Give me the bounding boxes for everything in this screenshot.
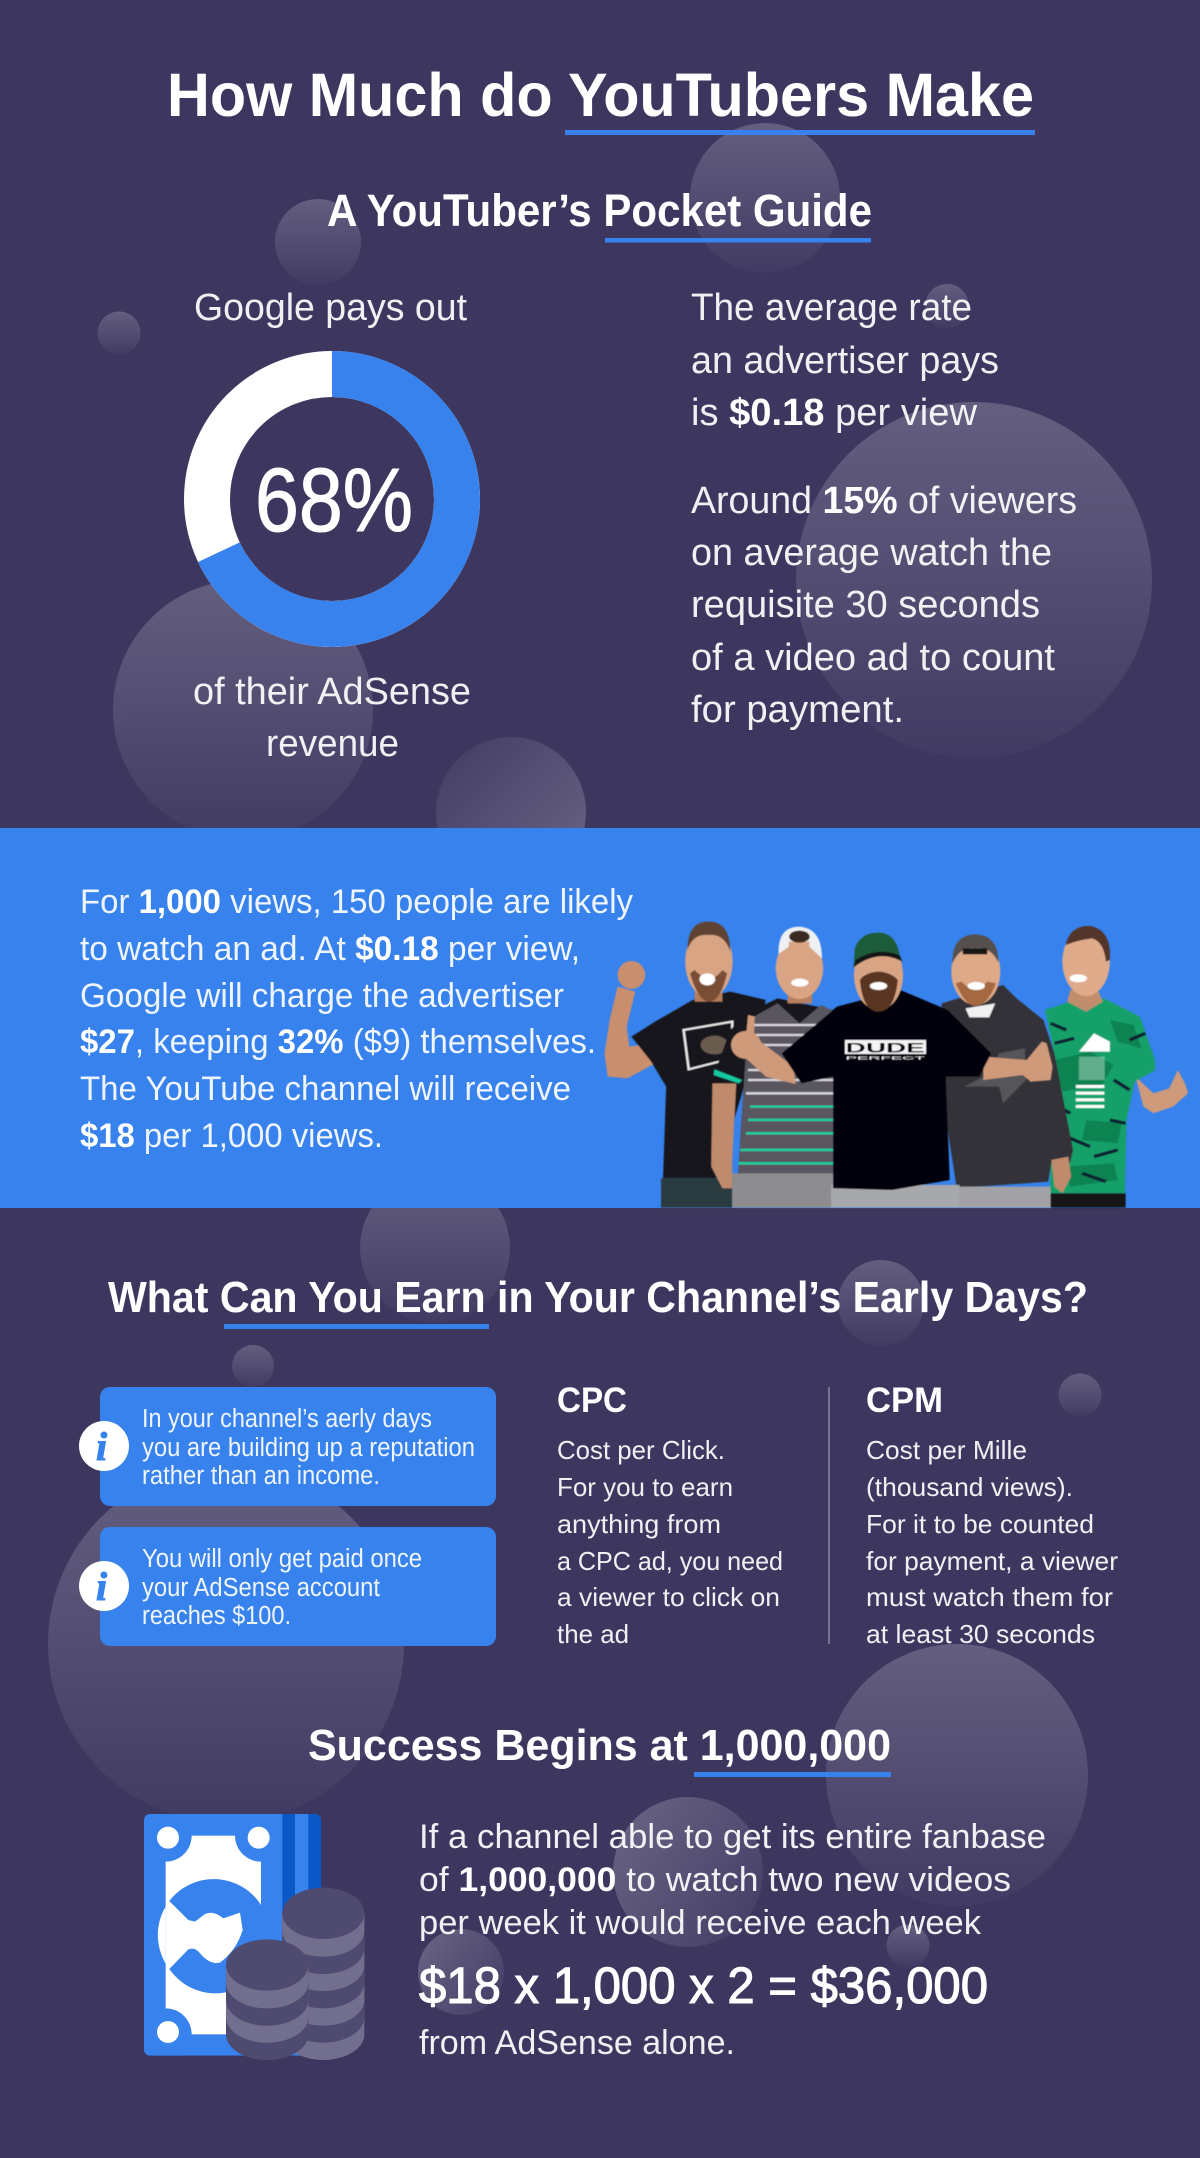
heading: success: Success Begins at 1,000,000 (308, 1721, 891, 1770)
icon: info: i (96, 1564, 107, 1609)
panel: CPM definition: CPM (866, 1381, 943, 1420)
callout: reputation: you are building up a reputation (142, 1434, 475, 1462)
panel: CPC definition (557, 1381, 783, 1649)
person 4: dark grey hoodie and backwards cap (940, 934, 1073, 1208)
icon: info (79, 1421, 129, 1471)
person 3: center black hoodie and green cap: DUDE (846, 1041, 925, 1056)
text block: revenue example: Google will charge the advertiser (80, 977, 564, 1015)
text block: viewers percent: for payment. (691, 689, 904, 731)
panel: CPM definition: at least 30 seconds (866, 1619, 1095, 1649)
panel: CPM definition (866, 1381, 1118, 1649)
text block: average rate: The average rate (691, 287, 972, 329)
donut chart: 68 percent: 68% (255, 451, 413, 551)
text block: revenue example: to watch an ad. At $0.18 per view, (80, 930, 580, 968)
icon: info (79, 1561, 129, 1611)
title: How Much do YouTubers Make (167, 61, 1034, 129)
panel: CPM definition: For it to be counted (866, 1509, 1094, 1539)
panel: CPM definition: must watch them for (866, 1582, 1113, 1612)
callout: reputation: In your channel’s aerly days (142, 1405, 432, 1433)
formula: $18 x 1,000 x 2 = $36,000 (419, 1957, 988, 2014)
panel: CPM definition: for payment, a viewer (866, 1546, 1118, 1576)
panel: google payout donut (184, 287, 480, 765)
panel: CPC definition: a viewer to click on (557, 1582, 780, 1612)
subtitle: A YouTuber’s Pocket Guide (327, 185, 872, 236)
text block: revenue example: $18 per 1,000 views. (80, 1117, 383, 1155)
text block: success calculation: from AdSense alone. (419, 2024, 735, 2062)
callout: paid once: reaches $100. (142, 1602, 291, 1630)
person 2: striped shirt and white cap (711, 927, 837, 1208)
text block: success calculation (419, 1818, 1046, 2062)
text block: revenue example (80, 883, 633, 1155)
text block: viewers percent (691, 480, 1077, 731)
callout: paid once: You will only get paid once (142, 1545, 422, 1573)
callout: reputation (79, 1387, 496, 1506)
panel: blue band (0, 828, 1200, 1208)
text block: viewers percent: on average watch the (691, 532, 1052, 574)
text block: average rate: an advertiser pays (691, 340, 999, 382)
person 3: center black hoodie and green cap: PERFECT (846, 1056, 925, 1061)
panel: CPM definition: Cost per Mille (866, 1435, 1027, 1465)
panel: CPC definition: the ad (557, 1619, 629, 1649)
heading: early days: What Can You Earn in Your Channel’s Early Days? (108, 1273, 1088, 1322)
callout: reputation: rather than an income. (142, 1462, 380, 1490)
text: google pays out: Google pays out (194, 287, 467, 329)
text block: revenue example: $27, keeping 32% ($9) themselves. (80, 1023, 596, 1061)
panel: CPC definition: a CPC ad, you need (557, 1546, 783, 1576)
panel: CPC definition: anything from (557, 1509, 721, 1539)
text: of their adsense revenue: of their AdSense (193, 671, 471, 713)
text block: revenue example: For 1,000 views, 150 people are likely (80, 883, 633, 921)
text block: success calculation: If a channel able to get its entire fanbase (419, 1818, 1046, 1856)
callout: paid once: your AdSense account (142, 1574, 380, 1602)
person 1: raised arm and black tee (605, 922, 766, 1208)
text block: viewers percent: of a video ad to count (691, 637, 1055, 679)
icon: banknote and coin stacks (140, 1810, 364, 2060)
panel: CPC definition: For you to earn (557, 1472, 733, 1502)
donut chart: 68 percent (184, 351, 480, 647)
panel: CPC definition: Cost per Click. (557, 1435, 725, 1465)
person 3: center black hoodie and green cap (731, 933, 1053, 1208)
text block: revenue example: The YouTube channel will receive (80, 1070, 571, 1108)
text block: success calculation: per week it would receive each week (419, 1904, 982, 1942)
text block: viewers percent: requisite 30 seconds (691, 584, 1040, 626)
text block: average rate (691, 287, 999, 434)
person 5: green camo tee (1045, 926, 1188, 1208)
text block: average rate: is $0.18 per view (691, 392, 978, 434)
panel: CPM definition: (thousand views). (866, 1472, 1073, 1502)
text: of their adsense revenue (193, 671, 471, 765)
right coin stack (282, 1888, 364, 2060)
text block: success calculation: of 1,000,000 to watch two new videos (419, 1861, 1011, 1899)
text: of their adsense revenue: revenue (266, 723, 399, 765)
illustration: five team members (605, 922, 1188, 1208)
panel: CPC definition: CPC (557, 1381, 627, 1420)
callout: paid once (79, 1527, 496, 1646)
text block: viewers percent: Around 15% of viewers (691, 480, 1077, 522)
left coin stack (226, 1939, 308, 2060)
icon: info: i (96, 1424, 107, 1469)
